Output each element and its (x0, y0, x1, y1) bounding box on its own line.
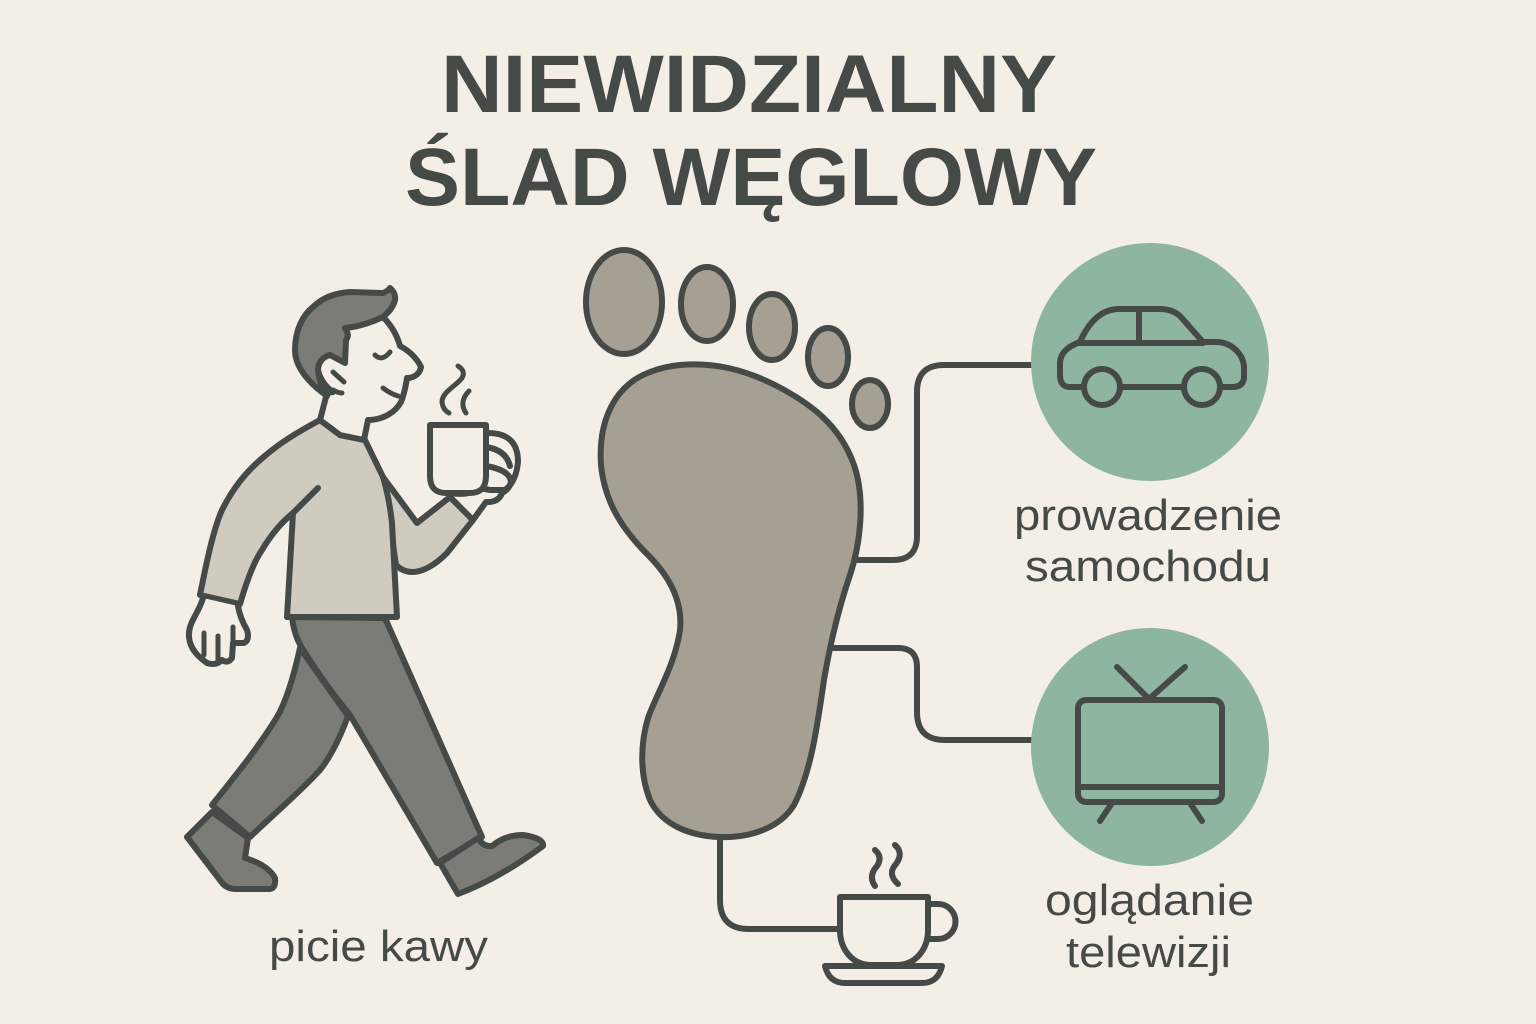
sweater torso and back arm (200, 420, 397, 617)
label: prowadzenie samochodu: prowadzenie (1014, 491, 1282, 540)
label: oglądanie telewizji: oglądanie (1045, 876, 1254, 925)
arm inner line (293, 488, 318, 513)
connector lines (720, 365, 1033, 929)
front leg and shoe (292, 617, 543, 894)
foot sole (601, 364, 861, 837)
face details (333, 352, 398, 396)
footprint (586, 250, 888, 837)
fingers on mug (450, 433, 518, 520)
icon: coffee cup on saucer (825, 845, 956, 983)
label: picie kawy: picie kawy (269, 922, 488, 971)
label: prowadzenie samochodu (1014, 491, 1282, 591)
icon: television in green circle (1031, 628, 1269, 866)
mug steam (442, 366, 469, 413)
title: NIEWIDZIALNY (441, 39, 1057, 130)
label: prowadzenie samochodu: samochodu (1025, 542, 1271, 591)
title: ŚLAD WĘGLOWY (405, 132, 1097, 223)
mug (430, 425, 486, 493)
label: oglądanie telewizji (1045, 876, 1254, 977)
toes (586, 250, 888, 428)
icon: car in green circle (1031, 243, 1269, 481)
face and neck (318, 317, 421, 440)
back hand (189, 598, 248, 664)
hair (295, 288, 395, 396)
label: oglądanie telewizji: telewizji (1066, 928, 1231, 977)
back leg and shoe (187, 648, 348, 889)
figure: man walking with coffee (187, 288, 543, 894)
front forearm (383, 477, 473, 572)
back hand fingers (204, 627, 233, 660)
title (405, 39, 1097, 223)
